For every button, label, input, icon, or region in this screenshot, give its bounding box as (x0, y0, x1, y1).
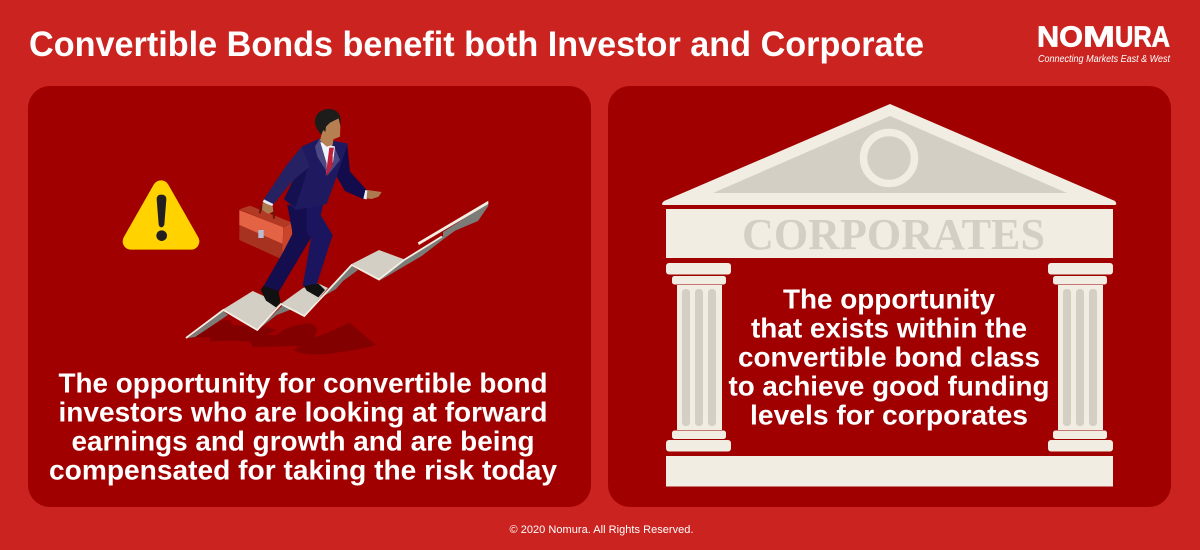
panel: investor (28, 86, 591, 507)
left column (666, 263, 731, 452)
text: corporate opportunity: convertible bond class (738, 342, 1040, 372)
illustration: businessman with briefcase (239, 109, 382, 307)
briefcase (239, 206, 292, 259)
entablature (666, 209, 1113, 258)
logo: Nomura (1037, 22, 1171, 65)
text: investor opportunity: compensated for taking the risk today (49, 454, 558, 486)
pediment (662, 104, 1116, 205)
icon: warning triangle (131, 189, 191, 241)
text: investor opportunity (49, 368, 558, 486)
arm: forward (337, 145, 367, 199)
shoes (261, 286, 281, 307)
illustration: corporate building (662, 104, 1116, 486)
right column (1048, 263, 1113, 452)
logo: Nomura: Connecting Markets East & West (1038, 53, 1171, 65)
cuffs and hands (263, 190, 368, 207)
illustration: shadow under chart (190, 320, 376, 354)
text: investor opportunity: investors who are looking at forward (58, 396, 548, 428)
text: corporate opportunity: to achieve good funding (728, 370, 1050, 402)
logo: Nomura: M (1083, 22, 1115, 54)
logo: Nomura: URA (1115, 22, 1170, 54)
jacket (284, 138, 347, 210)
title: Convertible Bonds benefit both Investor and Corporate (29, 25, 924, 64)
head (320, 117, 340, 147)
text: corporate opportunity: that exists within the (751, 312, 1027, 344)
panel: corporates (608, 86, 1171, 507)
text: investor opportunity: earnings and growth and are being (72, 426, 534, 456)
text: corporate opportunity (728, 284, 1050, 430)
legs (263, 205, 313, 293)
text: investor opportunity: The opportunity for convertible bond (58, 368, 548, 398)
plinth (666, 456, 1113, 486)
shirt and tie (319, 142, 335, 173)
arm: briefcase side (263, 147, 310, 204)
illustration: rising zig-zag chart (186, 201, 488, 338)
logo: Nomura: NO (1037, 22, 1083, 54)
text: corporate opportunity: The opportunity (783, 284, 996, 314)
lapels (315, 138, 340, 177)
footer: © 2020 Nomura. All Rights Reserved. (510, 524, 694, 536)
text: corporate opportunity: levels for corporates (750, 400, 1028, 430)
illustration: corporate building: CORPORATES (742, 210, 1045, 259)
